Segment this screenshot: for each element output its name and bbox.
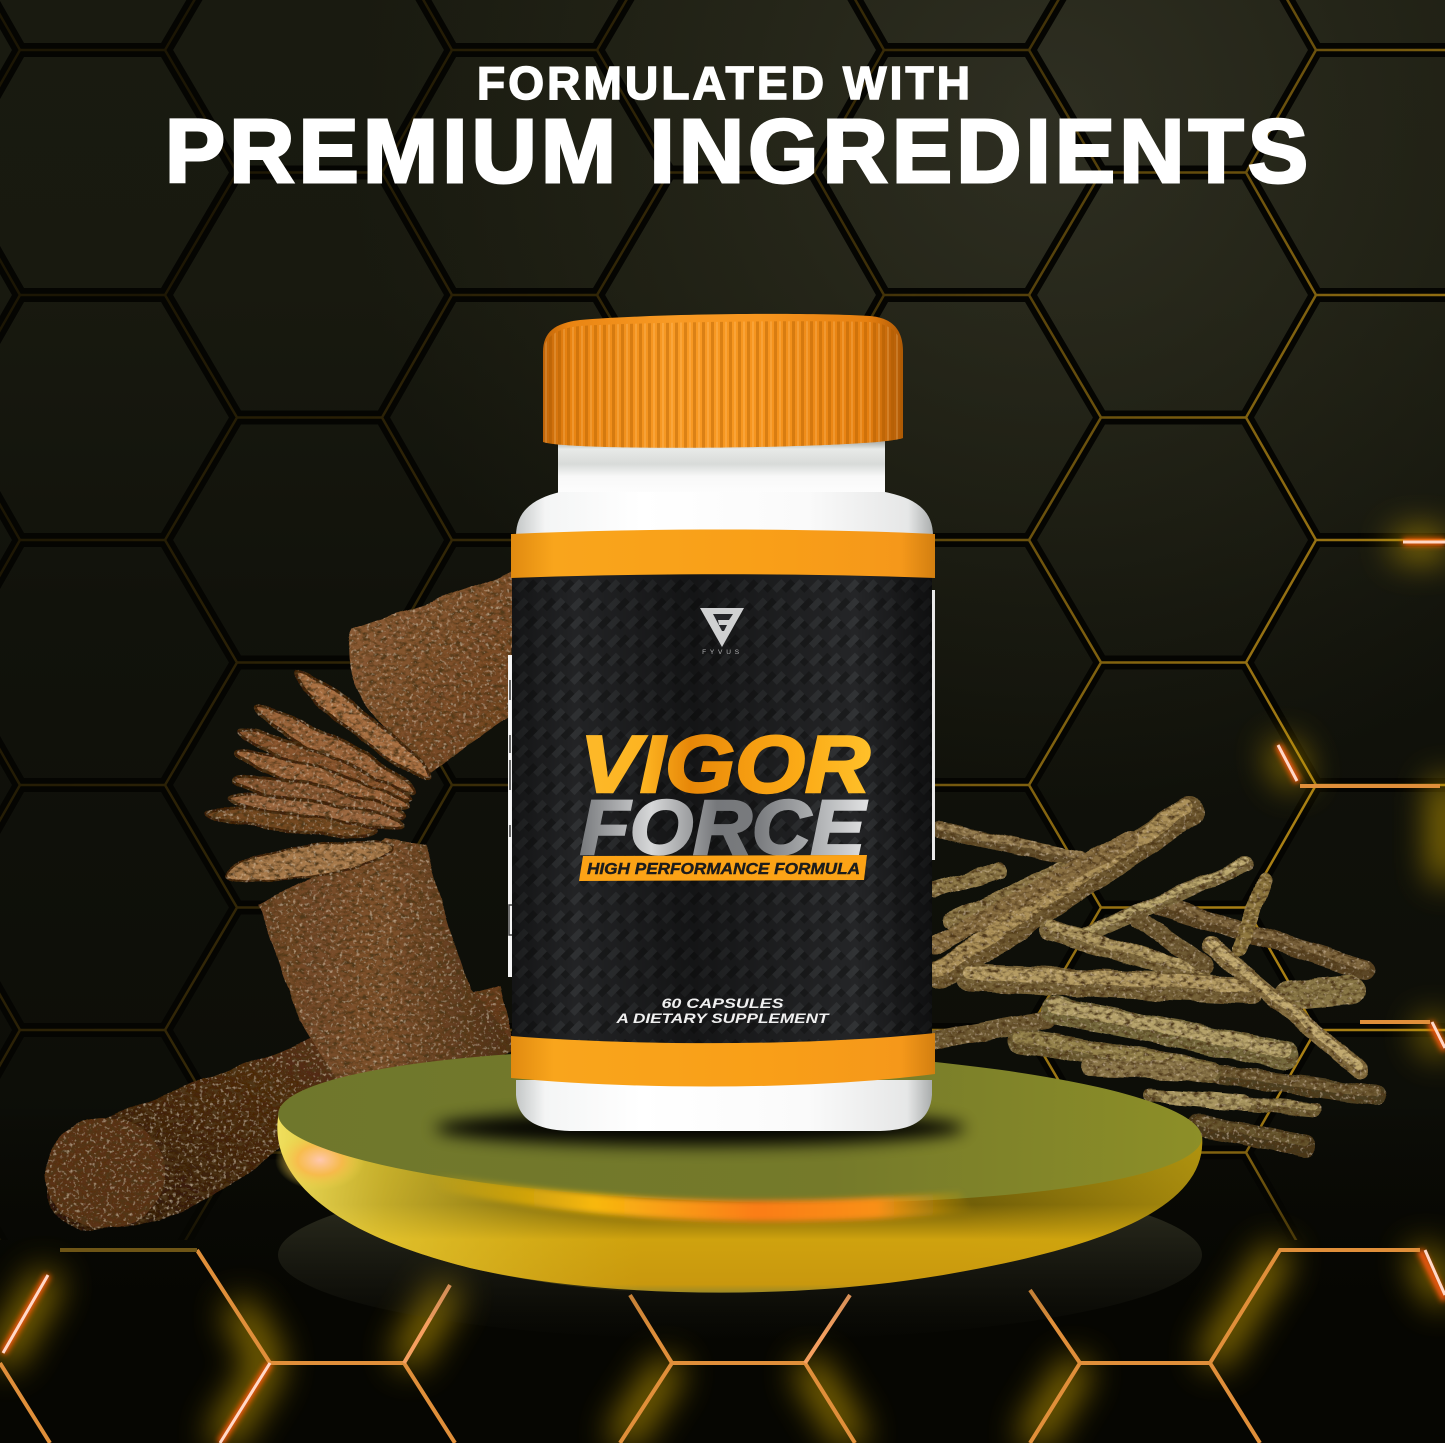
product name VIGOR: VIGOR (580, 720, 870, 810)
trunk (258, 838, 512, 1085)
brand name: FYVUS (702, 649, 743, 656)
bottle shoulder (516, 492, 933, 536)
title line one: FORMULATED WITH (477, 57, 970, 109)
glowing hexagon floor lines (0, 542, 1445, 1443)
bottle neck (558, 438, 885, 500)
platform right shading (960, 1136, 1202, 1272)
orange band top (511, 530, 935, 578)
tagline banner (579, 855, 867, 881)
platform top surface (276, 1038, 1204, 1214)
label side strip right (930, 590, 935, 860)
orange streak on rim (430, 1172, 975, 1221)
root cut end (45, 1118, 165, 1228)
lower root (48, 985, 515, 1230)
bottle base (516, 1080, 932, 1131)
label black panel (512, 565, 932, 1050)
orange cap (543, 314, 903, 448)
tagline banner: HIGH PERFORMANCE FORMULA (587, 861, 860, 878)
supplement line: A DIETARY SUPPLEMENT (615, 1010, 830, 1026)
capsule count: 60 CAPSULES (662, 995, 784, 1011)
platform left highlight (277, 1112, 640, 1292)
brand logo (700, 608, 744, 647)
ingredient: cassava root and slices (45, 570, 515, 1230)
bottle shadow (435, 1110, 965, 1146)
label side strip left (508, 655, 518, 977)
product name FORCE: FORCE (580, 785, 868, 871)
upper root (348, 570, 512, 772)
platform side (277, 1112, 1202, 1293)
top slice (224, 833, 396, 889)
platform pink highlight (275, 1130, 365, 1190)
product bottle (508, 314, 935, 1131)
title (165, 57, 1308, 202)
ingredient: ashwagandha roots (935, 808, 1375, 1146)
orange band bottom (511, 1033, 935, 1087)
platform (275, 1038, 1204, 1293)
title line two: PREMIUM INGREDIENTS (165, 102, 1308, 202)
slices (204, 663, 436, 841)
reflection of platform (278, 1170, 1202, 1340)
